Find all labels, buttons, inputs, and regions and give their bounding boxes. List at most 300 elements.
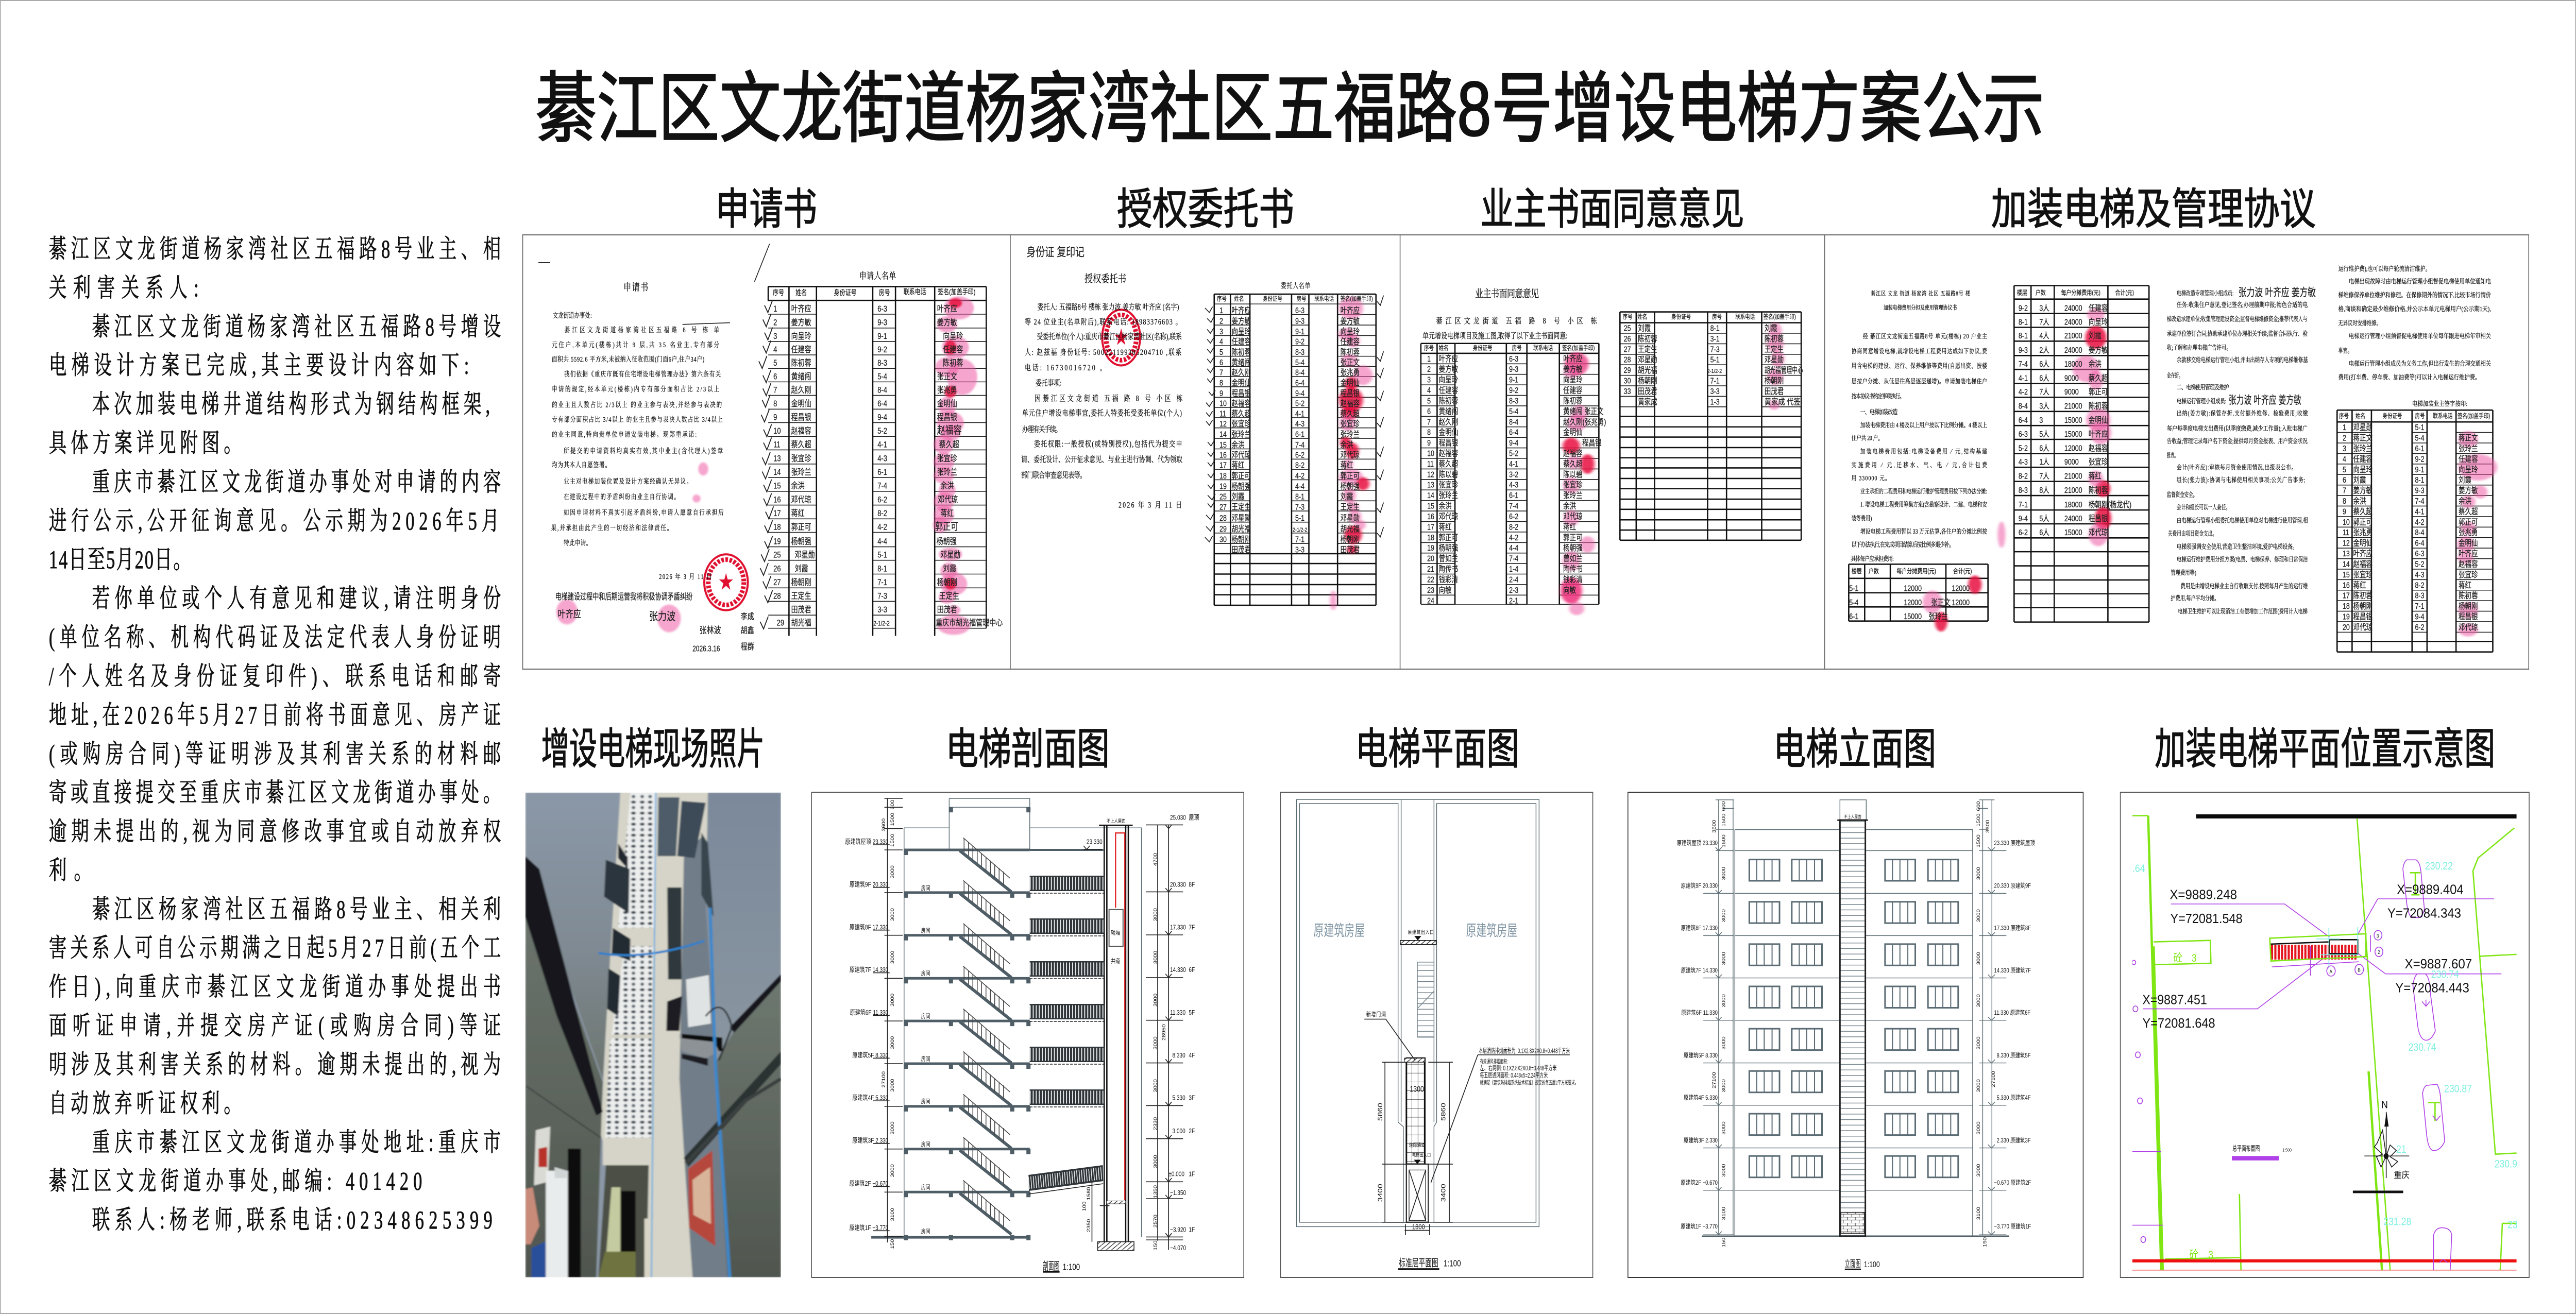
consent table text: 赵福容 bbox=[1439, 449, 1458, 458]
right dimension line bbox=[1083, 825, 1183, 1250]
application handwriting and table text: 蔡久超 bbox=[791, 440, 811, 450]
heading: agreement: 加装电梯及管理协议 bbox=[1991, 185, 2316, 233]
plan labels: 5860 bbox=[1439, 1103, 1447, 1121]
agreement table text: 9-3 bbox=[2019, 346, 2028, 355]
panel: application document bbox=[538, 244, 1003, 653]
agreement table text: 6-3 bbox=[2019, 430, 2028, 439]
dimension lines bbox=[1703, 800, 2006, 1235]
heading: plan drawing: 电梯平面图 bbox=[1355, 725, 1519, 773]
agreement table text: 邓星勋 bbox=[2353, 423, 2372, 433]
agreement table text: 杨朝刚 bbox=[2459, 602, 2478, 611]
application handwriting and table text: 刘霞 bbox=[943, 564, 956, 574]
section labels: 原建筑1F −3.770 bbox=[850, 1224, 888, 1232]
section labels: 原建筑7F 14.330 bbox=[850, 966, 888, 974]
consent table text: 赵久刚 bbox=[1439, 417, 1458, 427]
consent table text: 26 bbox=[1624, 335, 1631, 344]
consent table text: 余洪 bbox=[1439, 501, 1452, 511]
consent table text: 程昌银 bbox=[1582, 438, 1602, 448]
agreement table text: 5人 bbox=[2039, 429, 2049, 439]
section labels: 房间 bbox=[921, 1141, 930, 1148]
plan labels: 3400 bbox=[1439, 1184, 1447, 1202]
agreement table text: 程昌银 bbox=[2459, 612, 2478, 622]
consent table text: 5-4 bbox=[1509, 407, 1518, 416]
application handwriting and table text: 29 bbox=[777, 619, 784, 628]
doorway bbox=[599, 1165, 649, 1277]
section labels: 4700 bbox=[1153, 853, 1158, 866]
agreement text: 会计(叶齐应):审核每月资金使用情况,出报表公布。 bbox=[2177, 463, 2296, 471]
authorization table text: 郭正可 bbox=[1232, 471, 1251, 481]
plan labels: 1:100 bbox=[1444, 1259, 1461, 1269]
application handwriting and table text: 2-1/2-2 bbox=[873, 621, 890, 627]
application handwriting and table text: 张宜珍 bbox=[937, 454, 957, 464]
consent table text: 赵福容 bbox=[1563, 449, 1583, 458]
section labels: 原建筑8F 17.330 bbox=[850, 923, 888, 931]
agreement table text: 蒋正文 bbox=[2353, 433, 2372, 443]
windows bbox=[1749, 860, 1958, 1178]
consent table text: 陈初蓉 bbox=[1563, 396, 1583, 406]
application handwriting and table text: 5-2 bbox=[877, 427, 887, 436]
agreement table text: 7 bbox=[2343, 486, 2346, 496]
section labels: 3000 bbox=[1153, 1036, 1158, 1050]
agreement table text: 7-1 bbox=[2415, 602, 2425, 611]
section labels bbox=[845, 799, 1199, 1273]
consent table text: 20 bbox=[1427, 554, 1434, 564]
agreement table text: 蔡久超 bbox=[2089, 373, 2108, 383]
agreement table text: 邓代琼 bbox=[2353, 622, 2372, 632]
location coordinates and labels: 230.87 bbox=[2444, 1083, 2472, 1095]
heading: location drawing: 加装电梯平面位置示意图 bbox=[2155, 725, 2495, 773]
authorization text: 委托人: 五福路8号 楼栋 张力波 姜方敏 叶齐应 (名字) bbox=[1037, 302, 1179, 312]
agreement text: 电梯运行维护费用分担方案(电费、电梯保养、修理和日常保洁 bbox=[2177, 555, 2308, 564]
location coordinates and labels: 23 bbox=[2507, 1219, 2518, 1231]
elevation labels: 150 bbox=[1982, 1237, 1988, 1247]
consent table text: 4-3 bbox=[1509, 481, 1518, 490]
elevation labels: 原建筑9F 20.330 bbox=[1681, 881, 1718, 890]
plan labels: 本层消防排烟面积为: 0.1X2.8X2X0.8=0.448平方米 bbox=[1479, 1047, 1570, 1055]
authorization table text: 16 bbox=[1219, 451, 1227, 460]
agreement table text: 3人 bbox=[2039, 401, 2049, 411]
authorization stamp bbox=[1102, 310, 1140, 365]
agreement table text: 10 bbox=[2343, 518, 2350, 527]
authorization table text: 6-2 bbox=[1295, 451, 1304, 460]
application handwriting and table text: 8-4 bbox=[877, 386, 887, 395]
consent table text: 姜方敏 bbox=[1563, 365, 1583, 374]
agreement table text: 程昌银 bbox=[2353, 612, 2372, 622]
panel: agreement document bbox=[1849, 265, 2497, 652]
authorization table text: 身份证 复印记 bbox=[1026, 246, 1084, 259]
application handwriting and table text: 联系电话 bbox=[904, 288, 926, 296]
agreement table text: 陈初蓉 bbox=[2353, 590, 2372, 601]
elevation labels: 3600 bbox=[1986, 820, 1991, 833]
agreement table text: 7-4 bbox=[2415, 497, 2425, 506]
location coordinates and labels: X=9889.404 bbox=[2397, 882, 2464, 897]
agreement table text: 6-4 bbox=[2415, 539, 2425, 548]
agreement table text: 张正文 bbox=[1931, 598, 1951, 608]
authorization table text: 7-1 bbox=[1295, 535, 1304, 544]
authorization table text: 余洪 bbox=[1341, 439, 1353, 450]
agreement table text: 9-3 bbox=[2415, 486, 2425, 496]
wall art bbox=[526, 1187, 539, 1244]
consent table text: 身份证号 bbox=[1473, 344, 1493, 352]
application handwriting and table text: 叶齐应 bbox=[791, 303, 811, 314]
consent table text: 叶齐应 bbox=[1439, 353, 1458, 364]
consent table text: 赵久刚(张兆勇) bbox=[1563, 417, 1606, 427]
consent table text: 2-3 bbox=[1509, 586, 1518, 595]
agreement table text: 刘霞 bbox=[2459, 475, 2471, 485]
application body text: 业主对电梯加装位置及设计方案经确认无异议。 bbox=[564, 477, 692, 485]
elevation labels: 1500 bbox=[1722, 813, 1726, 827]
walkway hatch bbox=[1404, 1058, 1425, 1164]
agreement text: 电梯运行管理小组成员为义务工作,但出行发生的合理交通相关 bbox=[2349, 360, 2491, 367]
agreement table text: 12000 bbox=[1952, 584, 1970, 593]
authorization text: 因綦江区文龙街道 五福 路 8 号 小区 栋 bbox=[1035, 394, 1183, 403]
agreement table text: 7-1 bbox=[2019, 501, 2028, 509]
balcony walkways bbox=[1030, 876, 1105, 1107]
authorization table text: 4-4 bbox=[1295, 482, 1304, 491]
application body text: 申请书 bbox=[623, 282, 648, 293]
authorization table text: 王定生 bbox=[1341, 502, 1360, 512]
application handwriting and table text: 王定生 bbox=[791, 591, 811, 601]
agreement table text: 7人 bbox=[2039, 317, 2049, 327]
agreement table text: 24000 bbox=[2064, 346, 2082, 355]
authorization text: 部门联合审查意见表等。 bbox=[1021, 470, 1086, 480]
agreement text: 梯改造承建单位;收集管理建设资金;监督电梯维修资金;推荐代表人与 bbox=[2167, 315, 2308, 323]
agreement table text: 24000 bbox=[2064, 514, 2082, 523]
agreement table text: 8-4 bbox=[2415, 528, 2425, 538]
agreement text: 具体每户应承担费用: bbox=[1851, 555, 1894, 562]
axis bubbles bbox=[2327, 930, 2383, 976]
authorization table text: 3-3 bbox=[1295, 545, 1304, 555]
agreement text: 关费用由项目资金支出。 bbox=[2168, 530, 2217, 537]
location coordinates and labels: 3 bbox=[2192, 952, 2197, 965]
location coordinates and labels: 230.74 bbox=[2431, 968, 2459, 981]
agreement table text: 12000 bbox=[1904, 584, 1922, 593]
application handwriting and table text: 6-1 bbox=[877, 468, 887, 477]
agreement text: 层按户分摊、从低层往高层逐层递增)。申请加装电梯住户 bbox=[1852, 377, 1987, 385]
agreement table text: 姜方敏 bbox=[2353, 486, 2372, 496]
consent table text: 序号 bbox=[1424, 344, 1434, 352]
agreement text: 运行维护费),也可以每户轮流清洁维护。 bbox=[2338, 265, 2431, 272]
authorization table text: 18 bbox=[1219, 472, 1227, 481]
floor slabs bbox=[904, 849, 1104, 851]
section labels: 不上人屋面 bbox=[1107, 818, 1125, 824]
authorization table text: 19 bbox=[1219, 482, 1227, 491]
authorization table text: 杨朝强 bbox=[1232, 482, 1251, 491]
stair treads bbox=[1417, 962, 1434, 1037]
application handwriting and table text: 李成 bbox=[741, 612, 754, 622]
section labels: 1F bbox=[1189, 1226, 1195, 1234]
agreement table text: 21000 bbox=[2064, 402, 2082, 411]
panel: location drawing bbox=[2121, 792, 2529, 1277]
application handwriting and table text: 赵福容 bbox=[937, 424, 962, 436]
agreement table text: 9-4 bbox=[2415, 612, 2425, 622]
application handwriting and table text: 26 bbox=[773, 565, 781, 574]
authorization table text: 姜方敏 bbox=[1232, 316, 1251, 326]
agreement table text: 刘霞 bbox=[2353, 475, 2366, 485]
application handwriting and table text: 张宜珍 bbox=[791, 454, 811, 464]
consent text: 单元增设电梯项目及施工图,取得了以下业主书面同意: bbox=[1422, 331, 1568, 340]
north arrow and wind rose bbox=[2364, 1112, 2409, 1178]
consent table text: 30 bbox=[1624, 377, 1631, 386]
application handwriting and table text: 金明仙 bbox=[791, 399, 811, 409]
authorization table text: 邓星勋 bbox=[1232, 514, 1251, 523]
consent table text: 23 bbox=[1427, 586, 1434, 595]
agreement table text: 6人 bbox=[2039, 528, 2049, 538]
consent table text: 1 bbox=[1427, 354, 1431, 364]
authorization table text: 杨朝刚 bbox=[1341, 535, 1360, 544]
consent fingerprints bbox=[1561, 323, 1785, 615]
heading: application: 申请书 bbox=[716, 185, 817, 233]
consent text: 綦江区文龙街道 五福 路 8 号 小区 栋 bbox=[1436, 316, 1597, 325]
elevation labels: 1:100 bbox=[1864, 1260, 1880, 1269]
agreement table text: 张玲兰 bbox=[2353, 443, 2372, 453]
application body text: 2026 年 3 月 11 日 bbox=[659, 572, 712, 581]
authorization table text: 7-4 bbox=[1295, 441, 1304, 450]
application handwriting and table text: 赵福容 bbox=[791, 426, 811, 436]
agreement table text: 金明仙 bbox=[2459, 538, 2478, 548]
authorization table text: 任建容 bbox=[1341, 337, 1360, 347]
consent table text: 4 bbox=[1427, 386, 1431, 396]
authorization table text: 郭正可 bbox=[1341, 471, 1360, 481]
plan labels: 连廊通道 bbox=[1409, 1141, 1425, 1148]
authorization table text: 27 bbox=[1219, 503, 1227, 512]
banner bbox=[688, 1151, 715, 1246]
agreement table text: 9000 bbox=[2064, 458, 2079, 467]
agreement table text: 6 bbox=[2343, 476, 2346, 485]
plan labels: 3400 bbox=[1377, 1184, 1384, 1202]
agreement text: 实施费用 ⁄ 元,迁移水、气、电 ⁄ 元,合计包费 bbox=[1852, 461, 1988, 469]
agreement table text: 5-2 bbox=[2019, 444, 2028, 453]
elevation labels: 14.330 原建筑7F bbox=[1994, 966, 2031, 974]
authorization table text: 1 bbox=[1219, 306, 1223, 316]
application handwriting and table text: 杨朝刚 bbox=[937, 578, 957, 588]
consent table text: 邓代琼 bbox=[1439, 512, 1458, 521]
elevation labels: 3000 bbox=[1976, 909, 1981, 923]
application handwriting and table text: 任建容 bbox=[943, 345, 963, 354]
plan labels: 原建筑房屋 bbox=[1313, 922, 1365, 940]
authorization table text: 任建容 bbox=[1232, 337, 1251, 347]
agreement text: 护费用,每户平均分摊。 bbox=[2171, 594, 2219, 602]
application handwriting and table text: 张玲兰 bbox=[791, 467, 811, 477]
section labels: 2330 bbox=[1153, 1117, 1158, 1130]
application handwriting and table text: 8-2 bbox=[877, 509, 887, 519]
notice text block: 电梯设计方案已完成,其主要设计内容如下: bbox=[49, 351, 469, 380]
consent table text: 陈初蓉 bbox=[1439, 396, 1458, 406]
consent table text: 刘霞 bbox=[1638, 323, 1651, 333]
authorization table text: 4-1 bbox=[1295, 409, 1304, 419]
section labels: 8F bbox=[1189, 881, 1195, 889]
agreement table text: 5-4 bbox=[1849, 599, 1858, 608]
agreement signature table grid bbox=[2337, 410, 2493, 652]
section labels: 房间 bbox=[921, 927, 930, 934]
agreement table text: 张宜珍 bbox=[2089, 457, 2108, 467]
authorization table text: 杨朝强 bbox=[1341, 482, 1360, 491]
section labels: 11.330 bbox=[1170, 1010, 1185, 1016]
authorization table text: 5 bbox=[1219, 348, 1223, 357]
authorization table text: 身份证号 bbox=[1263, 295, 1282, 302]
agreement table text: 张兆勇 bbox=[2459, 528, 2478, 538]
application handwriting and table text: 6-3 bbox=[877, 305, 887, 314]
agreement table text: 8-1 bbox=[2019, 332, 2028, 341]
application handwriting and table text: 张林波 bbox=[700, 625, 721, 636]
elevation labels: 150 bbox=[1722, 1237, 1726, 1248]
plan labels: 标准层平面图 bbox=[1399, 1257, 1438, 1269]
agreement table text: 20 bbox=[2343, 623, 2350, 632]
consent table text: 陈初蓉 bbox=[1765, 333, 1784, 344]
consent table text: 张玲兰 bbox=[1563, 491, 1583, 501]
agreement text: 用含电梯的建设、运行、保养维修等费用(自愿出资、按楼 bbox=[1852, 362, 1988, 370]
section labels: 3000 bbox=[890, 1164, 895, 1178]
agreement text: 经 綦江区文龙街道五福路8号 单元(楼栋) 20 户业主 bbox=[1863, 332, 1987, 340]
authorization table text: 刘霞 bbox=[1341, 492, 1353, 502]
agreement fee table grid bbox=[2014, 286, 2149, 622]
authorization table text: 金明仙 bbox=[1341, 378, 1360, 388]
elevation labels: 20.330 原建筑9F bbox=[1994, 881, 2031, 890]
agreement text: 任务:收集住户意见,登记签名;办理前期申报;物色合适的电 bbox=[2177, 301, 2308, 309]
consent table text: 29 bbox=[1624, 366, 1631, 376]
left wall bbox=[539, 792, 621, 1078]
consent table text: 9-3 bbox=[1509, 365, 1518, 374]
agreement table text: 张宜珍 bbox=[2459, 570, 2478, 579]
consent table text: 张宜珍 bbox=[1439, 480, 1459, 490]
authorization table text: 7-3 bbox=[1295, 503, 1304, 512]
consent table text: 黄绪闯 bbox=[1439, 406, 1458, 416]
consent table text: 胡光福管理中心 bbox=[1765, 366, 1803, 376]
agreement table text: 6人 bbox=[2039, 373, 2049, 383]
elevation labels: 原建筑8F 17.330 bbox=[1681, 924, 1718, 932]
application handwriting and table text: 6-4 bbox=[877, 400, 887, 409]
location coordinates and labels: 230.9 bbox=[2495, 1158, 2517, 1170]
notice text block: 关利害关系人: bbox=[49, 274, 199, 302]
agreement table text: 5 bbox=[2343, 465, 2346, 474]
consent table text: 7-1 bbox=[1710, 377, 1720, 386]
elevation labels: 600 bbox=[1976, 801, 1981, 811]
notice text block: /个人姓名及身份证复印件)、联系电话和邮寄 bbox=[49, 662, 501, 691]
title: 綦江区文龙街道杨家湾社区五福路8号增设电梯方案公示 bbox=[535, 65, 2044, 152]
application handwriting and table text: 5 bbox=[773, 359, 777, 368]
authorization table text: 25 bbox=[1219, 492, 1227, 502]
agreement table text: 蔡久超 bbox=[2353, 507, 2372, 517]
location coordinates and labels: Y=72081.548 bbox=[2171, 911, 2243, 926]
application handwriting and table text: 1 bbox=[773, 305, 777, 314]
consent table text: 10 bbox=[1427, 449, 1434, 458]
authorization table text: 8-1 bbox=[1295, 492, 1304, 502]
notice text block: (或购房合同)等证明涉及其利害关系的材料邮 bbox=[49, 740, 501, 769]
building outline bbox=[904, 798, 1142, 1237]
agreement table text: 11 bbox=[2343, 528, 2349, 538]
agreement table text: 程昌银 bbox=[2089, 514, 2108, 523]
elevation labels: 3000 bbox=[1722, 1164, 1726, 1177]
heading: section drawing: 电梯剖面图 bbox=[946, 725, 1110, 773]
application handwriting and table text: 13 bbox=[773, 454, 781, 464]
agreement table text: 姜方敏 bbox=[2459, 486, 2478, 496]
location coordinates and labels: B bbox=[2358, 967, 2361, 973]
consent table text: 签名(加盖手印) bbox=[1764, 313, 1796, 320]
section labels: 原建筑屋顶 23.330 bbox=[845, 838, 888, 846]
application body text: 果,并承担由此产生的一切经济和法律责任。 bbox=[551, 523, 672, 532]
elevation labels: 5.330 原建筑4F bbox=[1997, 1094, 2031, 1101]
section labels: 1F bbox=[1189, 1171, 1195, 1178]
elevation labels: 1500 bbox=[1976, 813, 1981, 827]
section labels: 原建筑4F 5.330 bbox=[852, 1094, 888, 1102]
new elevator footprint bbox=[2270, 927, 2370, 968]
agreement table text: 8-3 bbox=[2019, 486, 2028, 495]
section labels: 房间 bbox=[921, 1098, 930, 1105]
consent table text: 12 bbox=[1427, 470, 1434, 480]
agreement text: 管理费用等) bbox=[2171, 569, 2196, 576]
consent table text: 5-1 bbox=[1710, 355, 1720, 365]
consent table text: 13 bbox=[1427, 481, 1434, 490]
application handwriting and table text: 向呈玲 bbox=[943, 331, 963, 341]
agreement table text: 5-4 bbox=[2415, 434, 2425, 443]
section labels: 1580 bbox=[1087, 1187, 1092, 1200]
agreement table text: 15000 bbox=[2064, 430, 2082, 439]
application handwriting and table text: 27 bbox=[773, 578, 781, 588]
authorization table text: 3 bbox=[1219, 328, 1223, 336]
agreement table text: 蒋红 bbox=[2353, 581, 2366, 590]
location coordinates and labels: 砼 bbox=[2173, 952, 2182, 965]
agreement text: 格,商谈和确定最少维修价格,并公示本单元电梯用户(公示期1天), bbox=[2338, 305, 2491, 313]
consent table text: 陈以碧 bbox=[1563, 469, 1583, 480]
elevation labels: 3000 bbox=[1722, 1079, 1726, 1093]
application signature table grid bbox=[768, 286, 986, 638]
elevation labels: 3000 bbox=[1976, 1121, 1981, 1135]
authorization table text: 签名(加盖手印) bbox=[1341, 295, 1373, 302]
agreement table text: 8-4 bbox=[2019, 402, 2028, 411]
elevation labels: 原建筑6F 11.330 bbox=[1681, 1009, 1718, 1016]
application handwriting and table text: 身份证号 bbox=[834, 288, 857, 297]
location coordinates and labels: 1:500 bbox=[2282, 1148, 2292, 1153]
agreement table text: 9000 bbox=[2064, 388, 2079, 397]
authorization table text: 4-2 bbox=[1295, 472, 1304, 481]
section labels: 3000 bbox=[890, 1121, 895, 1135]
authorization table text: 程昌银 bbox=[1341, 388, 1360, 398]
elevation labels: 1500 bbox=[1722, 834, 1726, 848]
agreement text: 余款移交给电梯运行管理小组,并由出纳存入专项的电梯维修基 bbox=[2177, 356, 2308, 364]
authorization table text: 10 bbox=[1219, 399, 1227, 408]
consent table text: 蔡久超 bbox=[1563, 459, 1583, 469]
agreement table text: 蒋正文 bbox=[2459, 433, 2478, 443]
agreement text: 按本协议书约定事项执行。 bbox=[1852, 392, 1905, 400]
tree symbols bbox=[2410, 873, 2440, 1121]
application handwriting and table text: 8-1 bbox=[877, 565, 887, 574]
section labels: 房间 bbox=[921, 1055, 930, 1063]
consent table text: 16 bbox=[1427, 513, 1434, 521]
application handwriting and table text: 15 bbox=[773, 482, 781, 491]
plan labels: 5860 bbox=[1377, 1103, 1384, 1121]
application handwriting and table text: 9-1 bbox=[877, 332, 887, 341]
authorization table text: 5-2 bbox=[1295, 399, 1304, 408]
application handwriting and table text: 程群 bbox=[741, 642, 754, 652]
agreement text: 每户每季度电梯支出费用(以季度缴费,减少工作量);入账电梯广 bbox=[2167, 424, 2308, 432]
section labels: 14.330 bbox=[1170, 967, 1186, 974]
consent table text: 叶齐应 bbox=[1563, 353, 1583, 364]
consent table text: 2 bbox=[1427, 365, 1431, 374]
agreement text: 加装电梯费用包括:电梯设备费用 ⁄ 元,结构基建 bbox=[1860, 447, 1987, 455]
authorization table text: 30 bbox=[1219, 535, 1227, 544]
section labels: 3000 bbox=[1153, 1079, 1158, 1093]
plan labels: 原建筑出入口 bbox=[1408, 929, 1434, 935]
agreement table text: 3 bbox=[2343, 445, 2346, 453]
consent table text: 身份证号 bbox=[1671, 313, 1691, 320]
elevation labels: 3000 bbox=[1722, 867, 1726, 880]
elevator shaft bbox=[1098, 825, 1134, 1251]
application handwriting and table text: 2026.3.16 bbox=[692, 644, 720, 653]
agreement text: 增设电梯工程费用暂以 33 万元估算,各住户的分摊比例按 bbox=[1860, 527, 1988, 535]
notice text block bbox=[49, 235, 501, 1235]
notice text block: 面听证申请,并提交房产证(或购房合同)等证 bbox=[49, 1012, 501, 1040]
application body text: 文龙街道办事处: bbox=[553, 311, 592, 319]
